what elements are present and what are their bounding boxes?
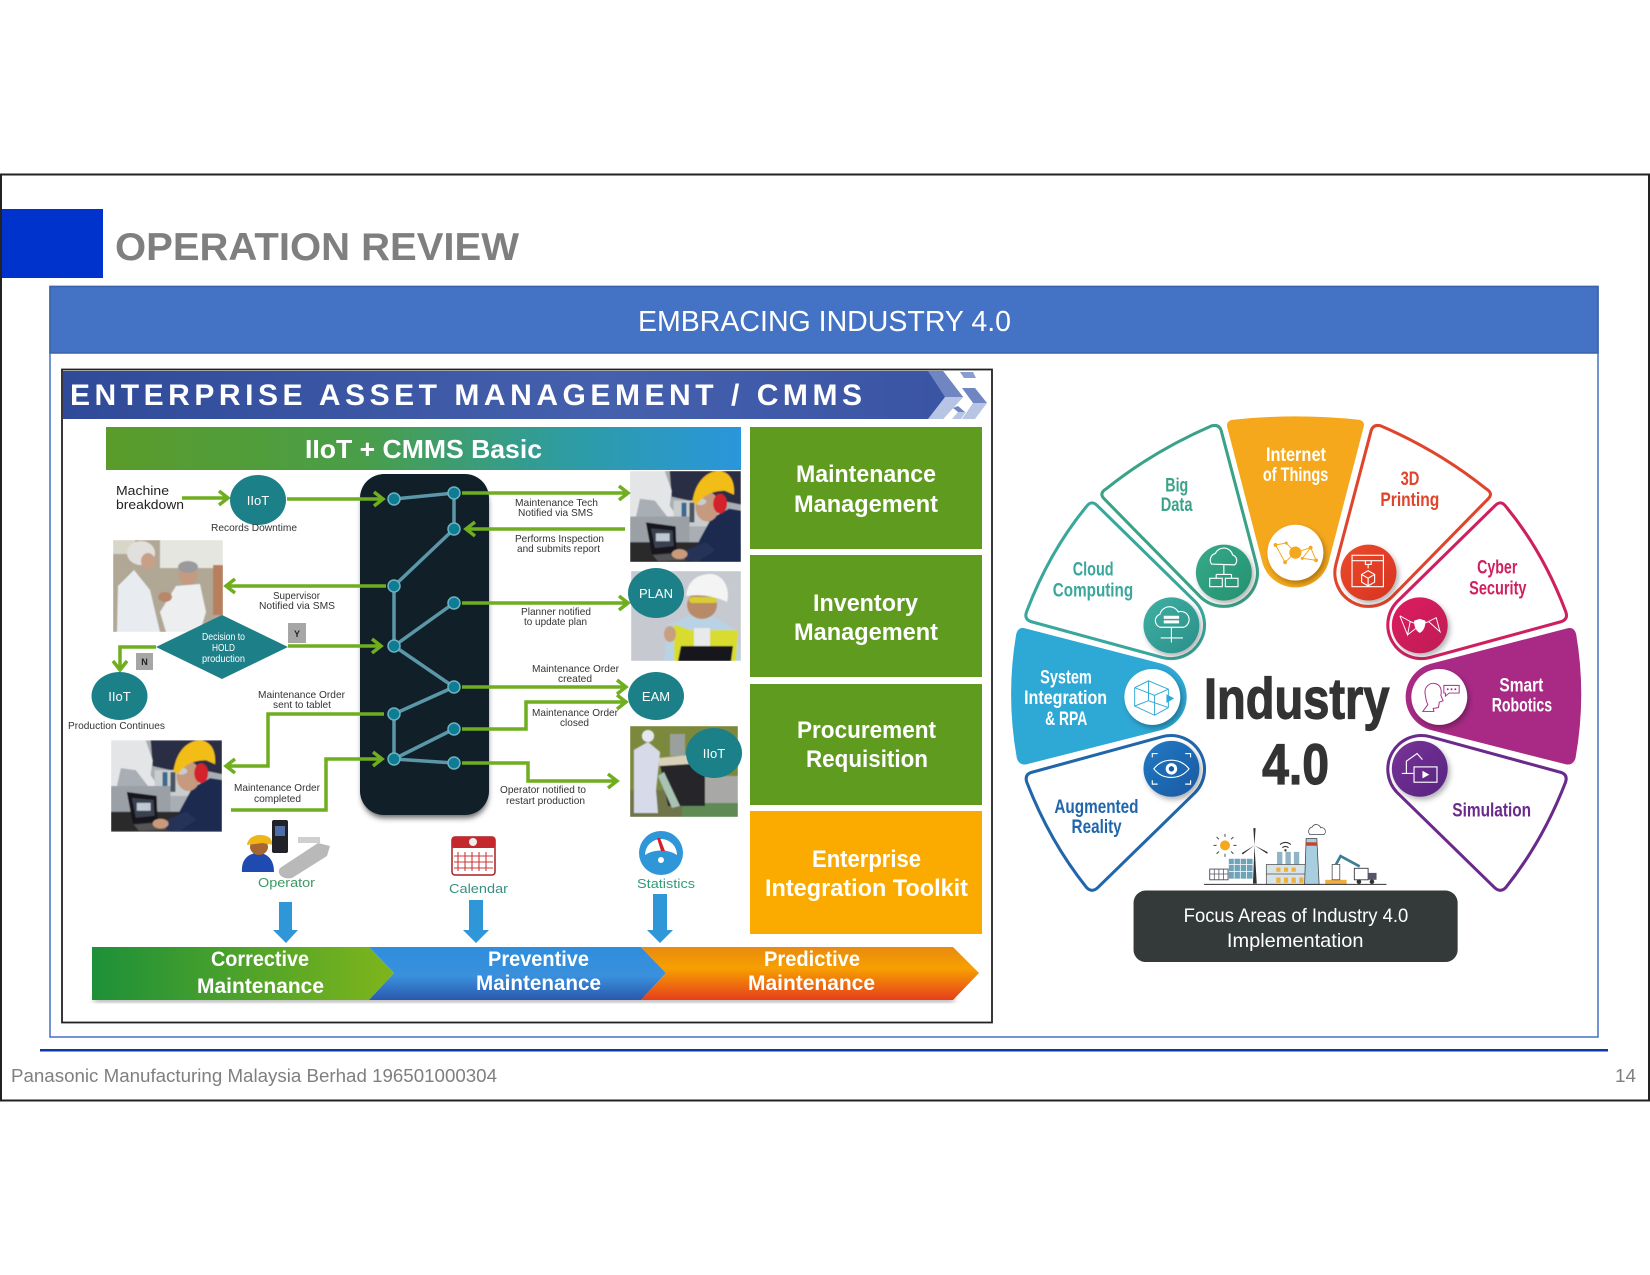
title: OPERATION REVIEW — [115, 226, 519, 269]
segment: big data: Big — [1165, 475, 1188, 496]
box: enterprise integration toolkit: Enterprise — [812, 846, 921, 873]
icon: operator: Operator — [258, 875, 316, 890]
segment: 3D printing: 3D — [1401, 469, 1420, 490]
box: inventory management: Inventory — [813, 590, 919, 617]
icon: smart factory skyline — [1204, 825, 1386, 884]
workflow captions: sent to tablet — [273, 699, 331, 711]
segment: cyber security: Cyber — [1477, 558, 1518, 579]
box: inventory management — [750, 555, 982, 677]
icon: calendar: Calendar — [449, 881, 509, 896]
workflow captions: completed — [254, 793, 301, 805]
node: IIoT production — [92, 672, 148, 720]
workflow captions: Maintenance Order — [258, 689, 345, 701]
workflow captions: Maintenance Order — [532, 707, 618, 719]
box: procurement requisition — [750, 684, 982, 805]
heading: Industry 4.0 — [1204, 667, 1390, 797]
heading bar: enterprise asset management / CMMS — [63, 371, 987, 419]
box: enterprise integration toolkit — [750, 811, 982, 934]
stage: preventive: Maintenance — [476, 972, 601, 995]
heading: IIoT + CMMS basic: IIoT + CMMS Basic — [305, 434, 542, 464]
Y tag — [288, 623, 306, 643]
segment: system integration and RPA: System — [1040, 667, 1092, 688]
icon: operator — [242, 820, 330, 890]
Y tag: Y — [294, 629, 300, 639]
segment: system integration and RPA: & RPA — [1045, 709, 1087, 730]
stage: predictive — [641, 947, 979, 1000]
box: maintenance management: Management — [794, 491, 938, 518]
segment: cyber security — [1388, 503, 1566, 659]
segment: internet of things — [1227, 416, 1364, 587]
node: IIoT production: IIoT — [108, 689, 131, 704]
content panel — [50, 286, 1598, 1037]
node: PLAN — [628, 568, 684, 618]
workflow captions: Operator notified to — [500, 784, 586, 796]
photo: operator at machine — [630, 726, 738, 817]
segment: smart robotics: Smart — [1499, 676, 1544, 697]
N tag — [136, 653, 153, 670]
workflow captions: closed — [560, 717, 589, 729]
decision diamond: production — [202, 653, 245, 665]
segment: big data: Data — [1161, 495, 1193, 516]
box: maintenance management — [750, 427, 982, 549]
photo: technician at laptop — [630, 471, 741, 562]
box: inventory management: Management — [794, 619, 938, 646]
slide frame — [1, 174, 1649, 1100]
photo: supervisors — [113, 540, 223, 632]
stage: corrective: Corrective — [211, 948, 309, 971]
workflow captions: restart production — [506, 795, 585, 807]
segment: 3D printing — [1335, 425, 1490, 606]
segment: cyber security: Security — [1469, 579, 1527, 600]
heading: Industry 4.0: 4.0 — [1262, 733, 1329, 797]
arrow: operator to corrective — [273, 902, 298, 943]
footer: company text: Panasonic Manufacturing Malaysia Berhad 196501000304 — [11, 1066, 497, 1086]
banner: embracing industry 4.0: EMBRACING INDUSTRY 4.0 — [638, 306, 1011, 338]
arrow: statistics to predictive — [647, 894, 673, 943]
workflow captions: and submits report — [517, 543, 600, 555]
segment: cloud computing: Computing — [1053, 581, 1133, 602]
panel: enterprise asset management — [62, 370, 992, 1022]
node: IIoT machine: IIoT — [703, 746, 725, 761]
stage: predictive: Predictive — [764, 948, 860, 971]
caption box: focus areas: Implementation — [1227, 931, 1364, 952]
workflow captions: Maintenance Order — [234, 782, 320, 794]
segment: simulation — [1388, 736, 1566, 890]
segment: augmented reality — [1026, 736, 1205, 890]
node: IIoT: IIoT — [247, 493, 269, 508]
segment: augmented reality: Reality — [1072, 817, 1122, 838]
workflow arrows — [113, 486, 628, 810]
icon: statistics gauge: Statistics — [637, 876, 696, 891]
segment: smart robotics: Robotics — [1492, 695, 1552, 716]
segment: simulation: Simulation — [1452, 801, 1531, 822]
footer: page number: 14 — [1615, 1066, 1636, 1086]
workflow captions: Performs Inspection — [515, 533, 604, 545]
workflow captions: Planner notified — [521, 606, 591, 618]
workflow captions: Maintenance Order — [532, 663, 619, 675]
node: IIoT — [230, 475, 286, 525]
heading bar: enterprise asset management / CMMS: ENTERPRISE ASSET MANAGEMENT / CMMS — [70, 379, 862, 412]
stage: corrective — [92, 947, 394, 1000]
workflow captions: Records Downtime — [211, 522, 297, 534]
box: maintenance management: Maintenance — [796, 461, 936, 488]
segment: smart robotics — [1406, 628, 1581, 764]
stage: predictive: Maintenance — [748, 972, 875, 995]
node: IIoT machine — [686, 728, 742, 778]
workflow captions: Notified via SMS — [259, 600, 335, 612]
segment: cloud computing: Cloud — [1073, 560, 1114, 581]
workflow captions — [68, 483, 619, 807]
stage: preventive — [369, 947, 666, 1000]
wheel: focus areas of Industry 4.0 — [1011, 416, 1581, 962]
segment: internet of things: of Things — [1263, 465, 1328, 486]
workflow captions: Notified via SMS — [518, 507, 593, 519]
segment: big data — [1102, 425, 1257, 606]
arrow: calendar to preventive — [463, 900, 489, 943]
heading: IIoT + CMMS basic — [106, 427, 741, 470]
workflow captions: breakdown — [116, 497, 184, 512]
workflow captions: Supervisor — [273, 590, 320, 602]
blue title block — [2, 209, 103, 278]
workflow captions: created — [558, 673, 592, 685]
photo: planner with helmet — [631, 571, 741, 661]
decision diamond: HOLD — [212, 642, 235, 654]
segment: system integration and RPA — [1011, 628, 1187, 764]
segment: internet of things: Internet — [1266, 445, 1327, 466]
heading: Industry 4.0: Industry — [1204, 667, 1390, 731]
footer rule — [40, 1049, 1608, 1052]
banner: embracing industry 4.0 — [50, 286, 1598, 353]
icon: calendar — [449, 837, 509, 896]
N tag: N — [141, 657, 148, 667]
workflow captions: Production Continues — [68, 720, 165, 732]
process: maintenance stages — [92, 947, 979, 1002]
workflow captions: to update plan — [524, 616, 587, 628]
segment: cloud computing — [1026, 503, 1205, 659]
box: enterprise integration toolkit: Integration Toolkit — [765, 875, 968, 902]
caption box: focus areas: Focus Areas of Industry 4.0 — [1184, 906, 1408, 927]
segment: system integration and RPA: Integration — [1024, 688, 1107, 709]
icon: statistics gauge — [637, 831, 696, 891]
workflow captions: Maintenance Tech — [515, 497, 598, 509]
node: PLAN: PLAN — [639, 586, 673, 601]
segment: 3D printing: Printing — [1380, 490, 1439, 511]
stage: corrective: Maintenance — [197, 975, 324, 998]
box: procurement requisition: Procurement — [797, 717, 936, 744]
stage: preventive: Preventive — [488, 948, 589, 971]
node: EAM: EAM — [642, 689, 670, 704]
decision diamond: Decision to — [202, 631, 245, 643]
decision diamond — [156, 615, 288, 679]
node: EAM — [628, 672, 684, 720]
workflow captions: Machine — [116, 483, 169, 498]
photo: technician completing order — [111, 740, 222, 832]
caption box: focus areas — [1134, 891, 1458, 962]
segment: augmented reality: Augmented — [1054, 797, 1139, 818]
box: procurement requisition: Requisition — [806, 746, 928, 773]
workflow spine — [360, 474, 489, 818]
